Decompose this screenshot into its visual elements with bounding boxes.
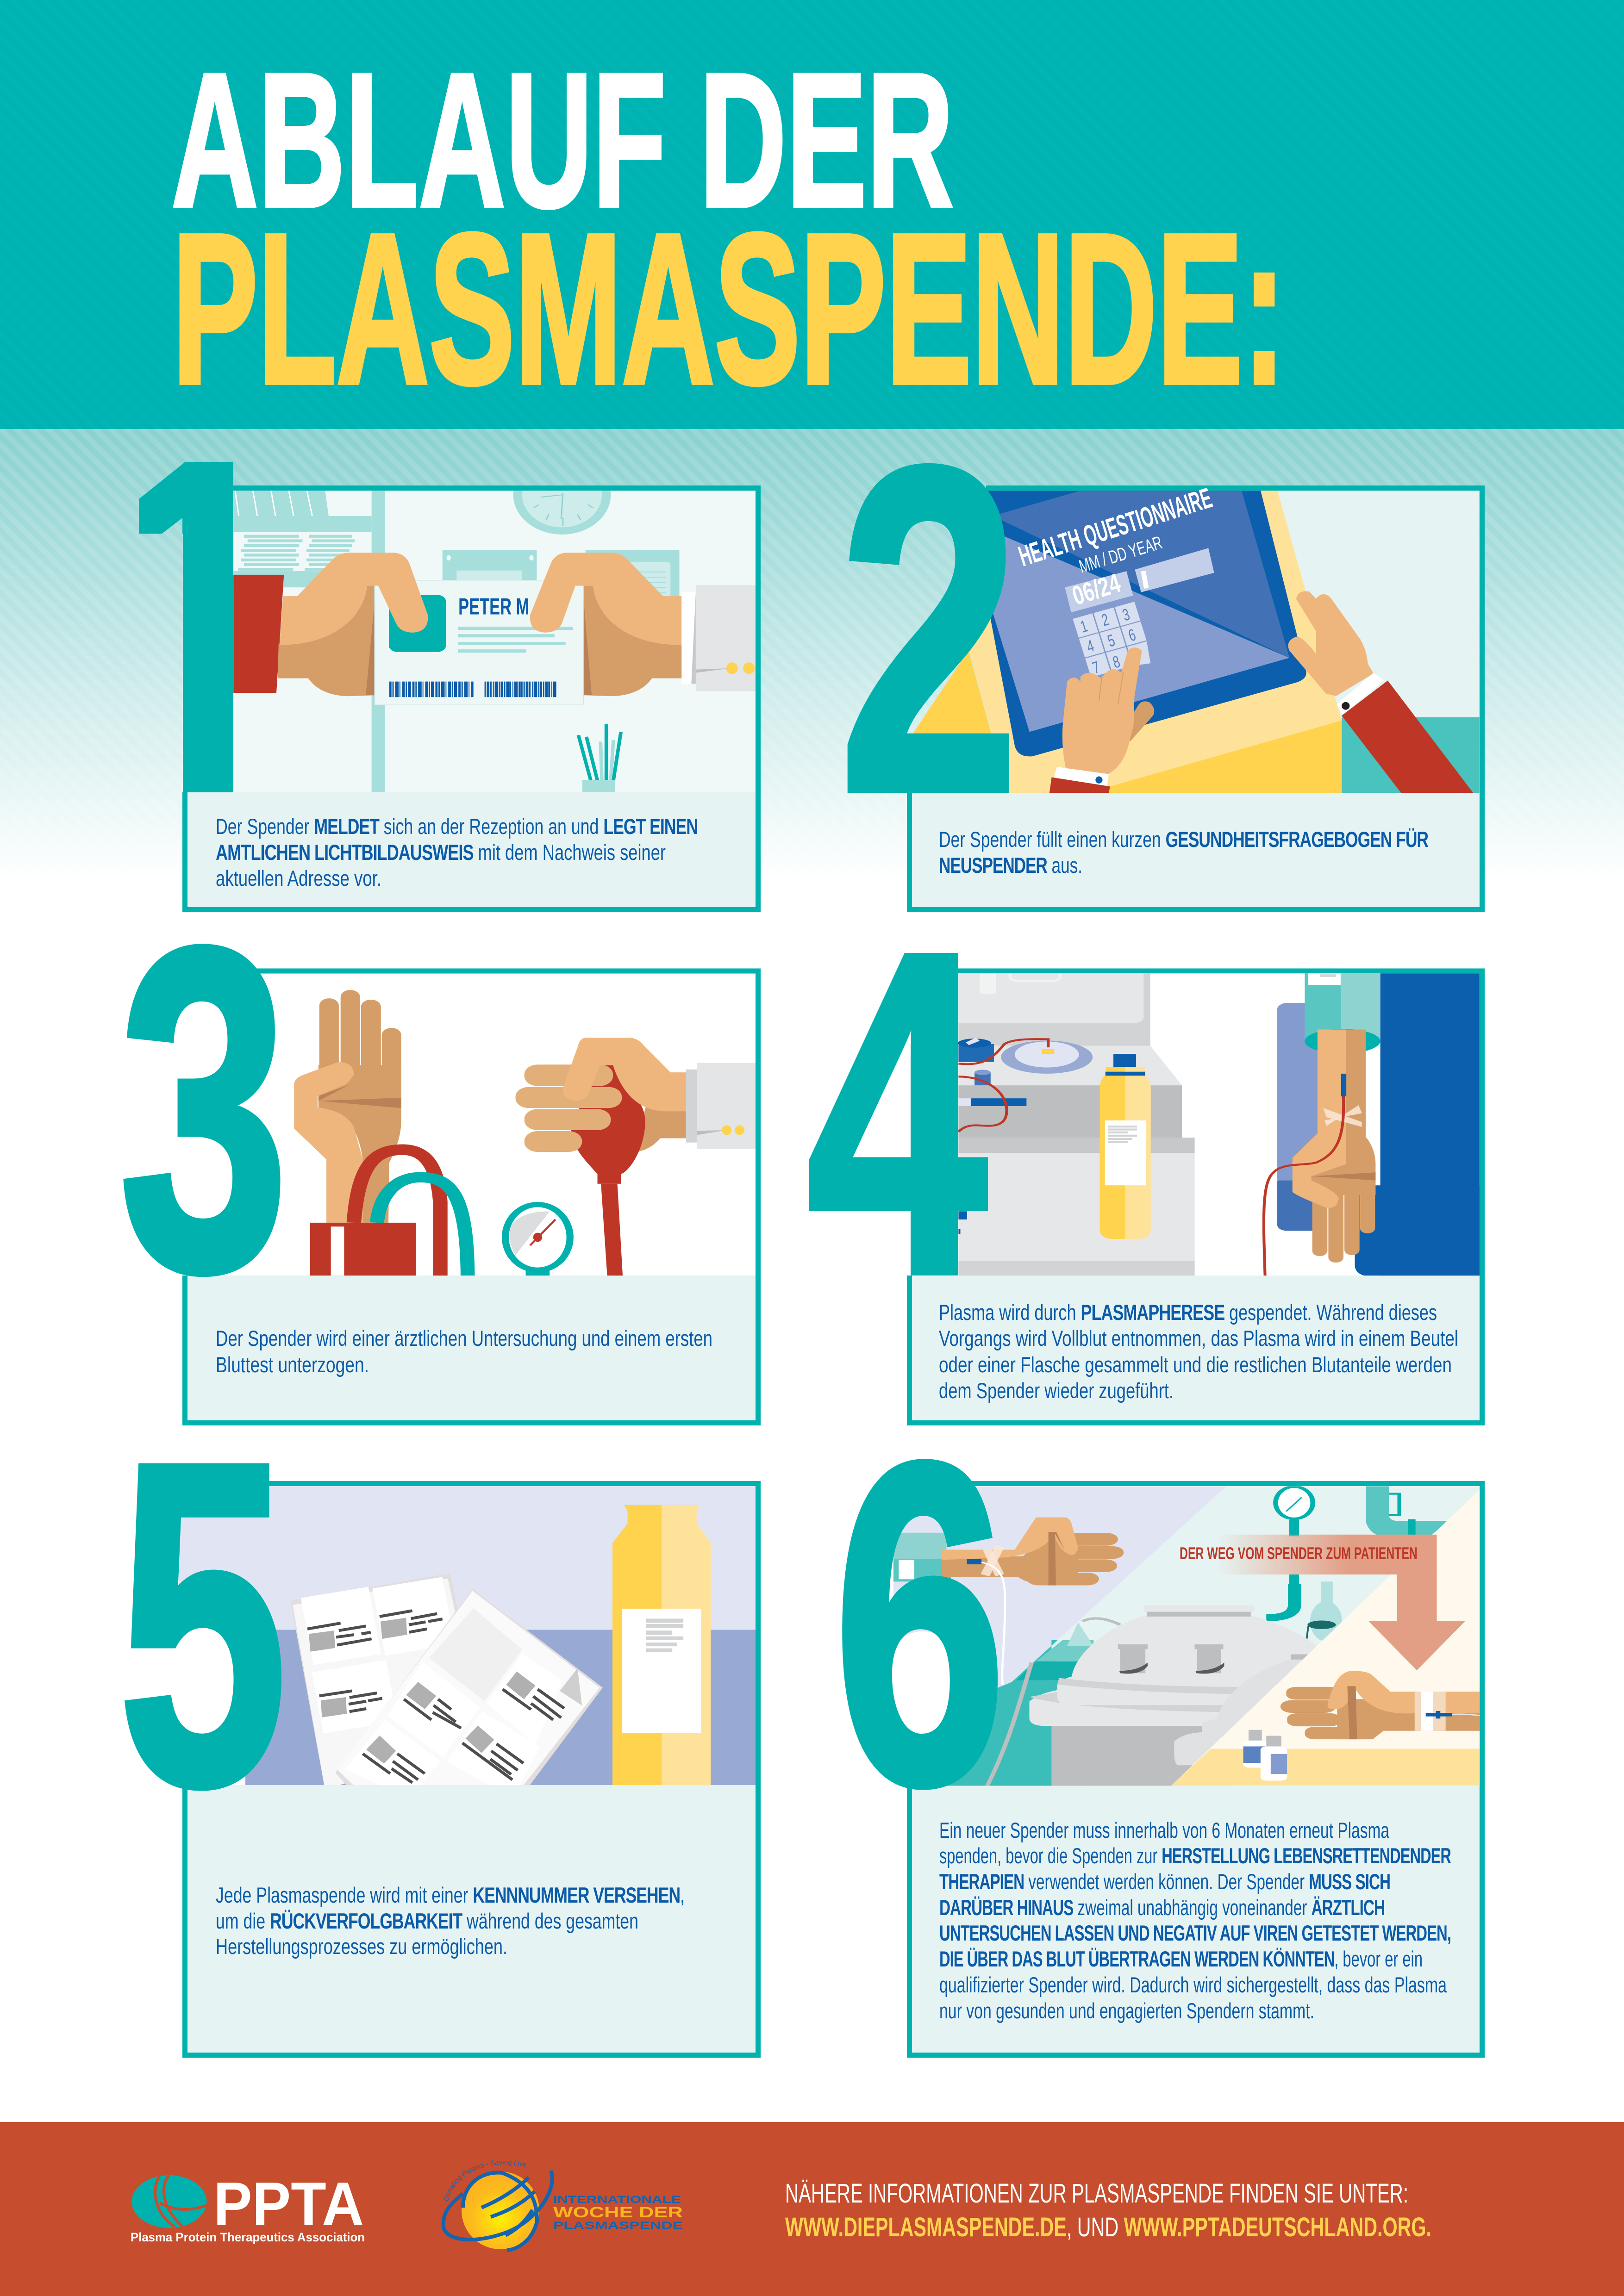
panel 6 text: THERAPIEN verwendet werden können. Der Spender MUSS SICH [939,1869,1390,1894]
panel 4 text: Plasma wird durch PLASMAPHERESE gespendet. Während dieses [939,1300,1437,1325]
keypad numbers: 1 [1078,616,1090,636]
keypad numbers [1078,604,1138,678]
panel 6 text [939,1818,1451,2023]
panel 6 text: qualifizierter Spender wird. Dadurch wird sichergestellt, dass das Plasma [939,1972,1447,1997]
panel 4 [807,857,1485,1425]
panel 1 illustration: reception and ID card [233,491,756,792]
header band [0,0,1624,429]
panel 6 text: DARÜBER HINAUS zweimal unabhängig voneinander ÄRZTLICH [939,1895,1385,1920]
panel 5 illustration: labels and plasma bottle [176,1486,756,1798]
number 2: 2 [839,371,1019,887]
gauge [506,1205,570,1276]
plasma bottle [612,1505,711,1785]
PPTA logo: PPTA [213,2170,364,2238]
white counter of number 6 [893,1631,951,1752]
keypad numbers: 2 [1099,610,1111,630]
panel 5 text [216,1883,685,1959]
number 3: 3 [119,852,289,1366]
keypad numbers: 6 [1126,625,1138,645]
panel 3 text: Der Spender wird einer ärztlichen Untersuchung und einem ersten [216,1326,712,1350]
Woche der Plasmaspende logo: INTERNATIONALE [553,2194,681,2205]
ID card [375,580,583,705]
lower hand [1049,647,1154,793]
keypad numbers: 3 [1120,604,1132,625]
panel 2 frame [907,488,1485,912]
patient hand [1280,1671,1480,1739]
donor hand [893,1518,1124,1786]
tablet text: MM / DD YEAR [1077,532,1165,577]
keypad [1072,601,1151,678]
panel 5 text: um die RÜCKVERFOLGBARKEIT während des gesamten [216,1909,638,1933]
palms behind card [278,586,682,696]
right cuff [681,585,756,691]
footer information text [785,2178,1431,2242]
panel 1 text: Der Spender MELDET sich an der Rezeption an und LEGT EINEN [216,814,698,839]
panel 2 [839,371,1485,912]
vials [1243,1730,1287,1780]
Woche der Plasmaspende logo: Donating Plasma - Saving Lives [0,0,527,2202]
raised hand [294,990,401,1223]
cuff and tubes [310,1150,468,1276]
squeeze bulb hand [516,1038,756,1276]
page background gradient [0,429,1624,916]
footer band [0,2122,1624,2296]
gauge and pipes [1266,1486,1448,1618]
panel 4 text [939,1300,1458,1403]
Woche der Plasmaspende logo: WOCHE DER [553,2204,683,2221]
front label sheet [335,1589,603,1798]
panel 1 text: aktuellen Adresse vor. [216,866,381,890]
panel 6 frame [907,1484,1485,2058]
panel 1 [139,462,761,912]
Woche der Plasmaspende logo: PLASMASPENDE [553,2220,683,2231]
sleeve left [233,575,284,693]
panel 3 frame [182,971,761,1425]
panel 1 text [216,814,698,890]
panel 4 text: dem Spender wieder zugeführt. [939,1378,1174,1403]
number 6: 6 [833,1369,1006,1879]
panel 4 frame [907,971,1485,1425]
tablet text: HEALTH QUESTIONNAIRE [1015,482,1216,572]
PPTA logo [131,2170,365,2244]
panel 5 frame [182,1484,761,2058]
upper hand [1288,591,1473,793]
keypad numbers: 5 [1106,630,1117,651]
keypad numbers: 8 [1111,652,1122,672]
panel 6 text: spenden, bevor die Spenden zur HERSTELLUNG LEBENSRETTENDENDER [939,1843,1451,1868]
tablet text: 06/24 [1068,568,1124,611]
panel 2 text [939,827,1428,877]
number 5: 5 [118,1368,287,1880]
panel 2 illustration: tablet with questionnaire [904,491,1480,793]
panel 3 text [216,1326,712,1377]
panel 6 text: Ein neuer Spender muss innerhalb von 6 Monaten erneut Plasma [939,1818,1390,1842]
footer information text: WWW.DIEPLASMASPENDE.DE, UND WWW.PPTADEUTSCHLAND.ORG. [785,2212,1431,2242]
back label sheet [291,1573,482,1790]
title [171,33,1286,428]
panel 6 text: nur von gesunden und engagierten Spendern stammt. [939,1998,1314,2023]
panel 2 text: NEUSPENDER aus. [939,853,1082,877]
panel 2 text: Der Spender füllt einen kurzen GESUNDHEITSFRAGEBOGEN FÜR [939,827,1428,852]
arrow caption: DER WEG VOM SPENDER ZUM PATIENTEN [1180,1544,1418,1563]
panel 3 text: Bluttest unterzogen. [216,1352,369,1377]
number 4: 4 [807,857,989,1369]
data entry boxes [1065,571,1133,612]
donor chair and arm [1264,973,1480,1276]
centrifuge [1030,1605,1317,1786]
panel 6 text: DIE ÜBER DAS BLUT ÜBERTRAGEN WERDEN KÖNNTEN, bevor er ein [939,1947,1423,1971]
title line 1: ABLAUF DER [171,33,954,247]
panel 4 illustration: plasmapheresis machine and donor arm [929,973,1480,1276]
panel 6 [833,1369,1485,2058]
machine [958,973,1195,1276]
lab glass [1067,1581,1342,1646]
panel 5 text: Herstellungsprozesses zu ermöglichen. [216,1934,507,1959]
panel 6 illustration: from donor to patient [893,1486,1480,1786]
PPTA logo: Plasma Protein Therapeutics Association [131,2230,365,2244]
tablet text [1015,482,1216,611]
panel 1 text: AMTLICHEN LICHTBILDAUSWEIS mit dem Nachweis seiner [216,840,666,865]
pencils [578,724,621,792]
panel 3 illustration: examination and blood pressure [294,990,756,1276]
arrow from donor to patient [1218,1535,1466,1670]
keypad numbers: 7 [1090,657,1102,678]
number 1: 1 [92,358,308,895]
collection bottle [1100,1054,1151,1239]
panel 3 [119,852,761,1425]
panel 1 frame [182,488,761,912]
panel 5 [118,1368,761,2058]
keypad numbers: 4 [1085,636,1096,656]
panel 4 text: oder einer Flasche gesammelt und die restlichen Blutanteile werden [939,1352,1452,1377]
panel 5 text: Jede Plasmaspende wird mit einer KENNNUMMER VERSEHEN, [216,1883,685,1907]
panel 4 text: Vorgangs wird Vollblut entnommen, das Plasma wird in einem Beutel [939,1326,1458,1350]
table [912,1640,1093,1786]
hands on card [280,553,681,645]
ID card: PETER M [458,593,529,619]
patient triangle [1171,1489,1480,1786]
